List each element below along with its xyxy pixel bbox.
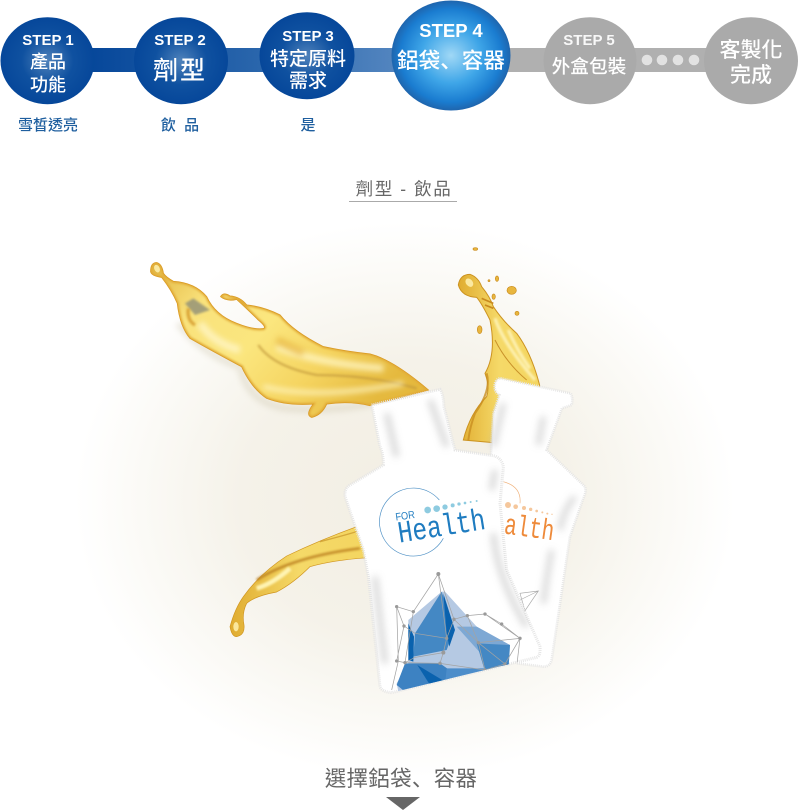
step 1: 產品 [30,52,66,72]
droplets [473,248,519,334]
front pouch with blue logo [345,389,540,693]
step 2 [134,17,228,104]
label: step 3 selection: 是 [300,117,316,134]
step 1 [0,17,94,104]
golden liquid splash: upper left [151,263,428,417]
final step: customization complete: 客製化 [720,39,782,62]
step 4 (current): STEP 4 [419,20,483,41]
connector: upcoming steps [505,48,710,72]
golden liquid splash: upper right with droplets [458,248,540,447]
connector: completed steps [90,48,400,72]
final step: customization complete [704,17,798,104]
prompt text: 選擇鋁袋、容器 [325,762,477,793]
back pouch with orange logo [490,378,586,667]
product pouches [345,378,586,693]
golden liquid splash: lower left [230,527,368,637]
blue polygon mountain art [397,592,510,692]
down arrow [386,797,420,810]
For Health logo: FOR [395,509,416,524]
next step prompt [325,762,477,810]
step 3: 特定原料 [270,48,346,70]
back pouch with orange logo: alth [502,510,556,549]
section heading: 劑型 - 飲品 [356,179,452,199]
progress dots [642,55,699,65]
step 1: STEP 1 [22,32,74,49]
step 3: 需求 [289,70,327,92]
step 3 [260,12,354,99]
For Health logo [379,488,488,556]
step 3: STEP 3 [282,28,334,45]
step 5: 外盒包裝 [552,56,627,77]
label: step 2 selection: 飲 品 [161,116,199,134]
step 2: 劑型 [153,57,207,85]
For Health logo: Health [395,504,488,553]
step 4 (current) [392,0,510,110]
highlights and shadow folds [151,263,428,417]
step 4 (current): 鋁袋、容器 [397,44,505,75]
step 5 [544,17,636,104]
step progress bar [0,0,798,110]
label: step 1 selection: 雪皙透亮 [18,117,78,134]
wireframe network [392,574,520,690]
selected step labels [18,116,316,134]
step 2: STEP 2 [154,32,206,49]
final step: customization complete: 完成 [730,64,772,87]
background glow [75,222,735,778]
step 1: 功能 [30,75,66,95]
step 5: STEP 5 [563,32,615,49]
